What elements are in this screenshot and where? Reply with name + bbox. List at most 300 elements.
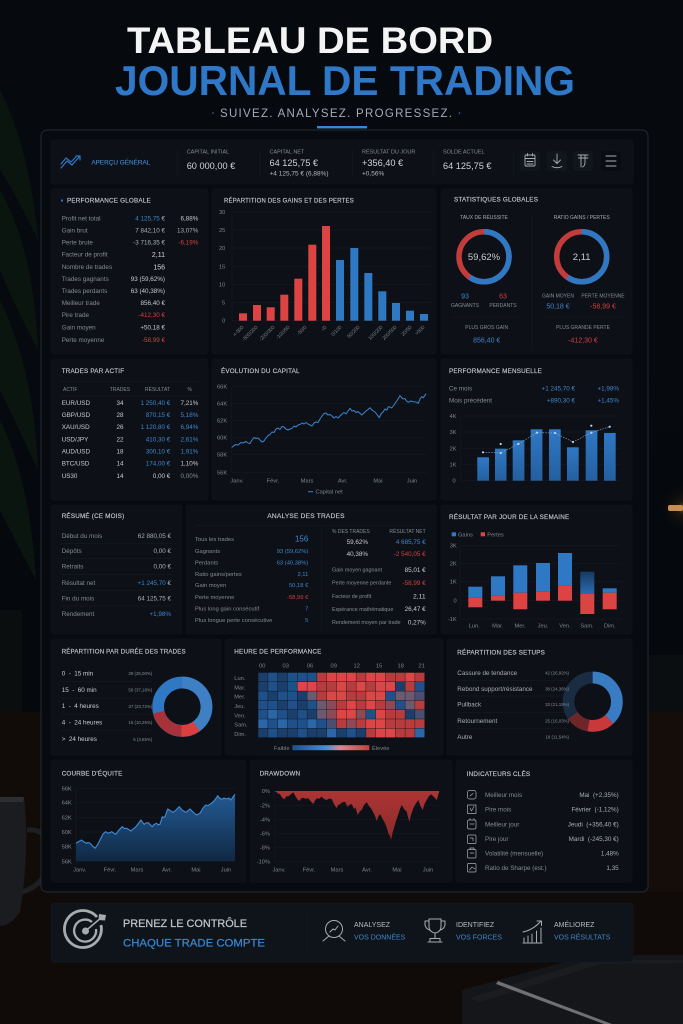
trade stats left: Gagnants	[195, 549, 220, 555]
area chart: Févr.	[104, 868, 117, 874]
line chart: 58K	[217, 453, 227, 459]
panel: indicateurs clés	[456, 760, 632, 882]
histogram: 15	[219, 264, 225, 270]
heading: STATISTIQUES GLOBALES	[454, 196, 538, 204]
indicators rows: Volatilité (mensuelle)	[485, 850, 543, 858]
panel: répartition par durée des trades	[51, 639, 221, 755]
icon: calendar	[520, 151, 540, 171]
setups rows: Cassure de tendance	[457, 670, 518, 677]
stacked bar chart: Ven.	[559, 624, 571, 630]
assets table: 1,91%	[180, 448, 199, 456]
heatmap scale: Faible	[274, 746, 290, 752]
drawdown chart: Janv.	[272, 868, 286, 874]
trade stats right: 4 685,75 €	[396, 539, 426, 546]
metrics table: Gain brut	[62, 228, 88, 234]
heading: HEURE DE PERFORMANCE	[234, 648, 322, 655]
average gain and loss: 50,18 €	[546, 304, 570, 310]
stat: solde actuel	[443, 150, 492, 171]
heading: INDICATEURS CLÉS	[467, 769, 530, 778]
line chart: 66K	[217, 385, 227, 391]
heatmap: Lun.	[234, 676, 246, 682]
setups rows: Autre	[457, 734, 473, 741]
assets table: 0,00 €	[153, 473, 171, 480]
title: JOURNAL DE TRADING	[115, 57, 575, 104]
monthly summary: +1,45%	[597, 398, 619, 404]
heading: RÉPARTITION DES SETUPS	[457, 647, 545, 656]
assets table: 18	[116, 448, 124, 456]
heatmap: Sam.	[234, 723, 248, 729]
average gain and loss: PERTE MOYENNE	[581, 294, 625, 300]
histogram: >500	[414, 325, 427, 337]
trade stats right: 26,47 €	[405, 606, 426, 613]
legend: Pertes	[487, 532, 504, 538]
trade stats right: Espérance mathématique	[332, 607, 393, 613]
histogram: 200/500	[381, 325, 399, 342]
metrics table: -6,19%	[178, 240, 199, 246]
trade stats left: Perte moyenne	[195, 595, 234, 601]
bar chart: 2K	[450, 446, 457, 452]
stat: capital net: 64 125,75 €	[270, 158, 318, 168]
duration rows: > 24 heures	[62, 736, 97, 743]
summary rows: +1 245,70 €	[138, 580, 171, 587]
trade stats right: Gain moyen gagnant	[332, 568, 383, 574]
assets table: RÉSULTAT	[145, 386, 170, 393]
histogram: 100/200	[367, 325, 385, 342]
drawdown chart: -4%	[260, 818, 270, 824]
drawdown chart: Avr.	[362, 868, 372, 874]
assets table: 14	[116, 473, 124, 480]
metrics table: Pire trade	[62, 312, 89, 319]
summary rows: 0,00 €	[153, 548, 171, 555]
item: améliorez	[523, 920, 611, 943]
footer banner	[51, 903, 633, 962]
assets table	[62, 386, 199, 480]
metrics table: Nombre de trades	[62, 264, 112, 271]
assets table: 0,00%	[180, 473, 199, 480]
trade stats right: -2 540,05 €	[394, 551, 426, 558]
metrics table: 2,11	[152, 252, 165, 259]
trade stats left: 7	[305, 606, 308, 612]
average gain and loss: GAIN MOYEN	[542, 294, 574, 300]
metrics table: 63 (40,38%)	[131, 288, 165, 295]
stat: résultat du jour: +0,56%	[362, 170, 384, 178]
largest loss	[556, 325, 611, 344]
assets table: XAU/USD	[62, 424, 90, 431]
heatmap: 15	[376, 664, 382, 670]
item: analysez: ANALYSEZ	[354, 922, 391, 929]
trade stats left: 156	[295, 535, 309, 544]
assets table: 5,18%	[180, 412, 199, 419]
indicators rows: Mai (+2,35%)	[579, 792, 619, 799]
stat: capital net: +4 125,75 € (6,88%)	[270, 170, 329, 178]
stacked bar chart: Mer.	[514, 624, 526, 630]
trade stats right: -58,99 €	[403, 580, 426, 587]
icon: download	[547, 151, 567, 171]
drawdown chart: -2%	[260, 803, 270, 809]
monthly summary: Mois précédent	[449, 398, 492, 404]
metrics table: Trades perdants	[62, 288, 107, 295]
duration rows: 39 (25,00%)	[128, 671, 153, 676]
indicators rows: Ratio de Sharpe (est.)	[485, 865, 547, 872]
indicators rows	[485, 792, 619, 872]
wins and losses counts: PERDANTS	[489, 303, 517, 309]
panel: drawdown	[250, 760, 452, 882]
wins and losses counts	[451, 294, 517, 309]
setups rows: Retournement	[457, 718, 497, 725]
icon: coffee cup	[0, 797, 50, 926]
duration rows: 4 - 24 heures	[62, 720, 102, 726]
indicators rows: Jeudi (+356,40 €)	[568, 822, 619, 828]
summary rows: 64 125,75 €	[138, 596, 171, 602]
duration rows: 16 (10,26%)	[128, 720, 153, 725]
icon: target	[64, 911, 106, 948]
heatmap: Mar.	[234, 685, 246, 691]
heatmap: 21	[419, 664, 425, 670]
drawdown chart	[257, 789, 439, 874]
indicators rows: Pire jour	[485, 836, 508, 843]
trade stats right	[332, 528, 426, 626]
heatmap scale: Élevée	[372, 745, 389, 752]
histogram: 10	[219, 282, 225, 288]
histogram: 0	[222, 319, 225, 325]
wins and losses counts: 93	[461, 294, 469, 300]
metrics table: Meilleur trade	[62, 300, 100, 307]
assets table: 870,15 €	[146, 412, 171, 419]
icon: filter	[573, 151, 593, 171]
trade stats right: Rendement moyen par trade	[332, 620, 401, 626]
monthly summary: +1 245,70 €	[542, 386, 575, 392]
aperçu label: APERÇU GÉNÉRAL	[91, 158, 151, 167]
drawdown chart: Mars	[331, 868, 343, 874]
stat: solde actuel: SOLDE ACTUEL	[443, 150, 485, 156]
line chart	[217, 385, 427, 485]
duration rows: 6 (3,85%)	[133, 737, 153, 742]
summary rows: 0,00 €	[153, 564, 171, 570]
trade stats left: Plus longue perte consécutive	[195, 618, 272, 624]
heatmap: 06	[307, 664, 313, 670]
legend	[452, 532, 504, 538]
heading: PERFORMANCE GLOBALE	[67, 198, 151, 204]
panel: performance globale	[51, 189, 208, 354]
assets table: 174,00 €	[146, 460, 171, 468]
duration rows	[62, 670, 153, 743]
stat: capital initial	[187, 150, 235, 171]
stat: capital initial: 60 000,00 €	[187, 161, 235, 171]
heading: ÉVOLUTION DU CAPITAL	[221, 366, 300, 375]
icon: indicators	[468, 790, 476, 872]
indicators rows: 1,48%	[601, 850, 619, 858]
area chart: 60K	[62, 830, 72, 836]
histogram: 0/100	[330, 325, 344, 338]
duration rows: 15 - 60 min	[62, 687, 97, 694]
assets table: EUR/USD	[62, 400, 90, 407]
average gain and loss: -58,99 €	[590, 304, 616, 310]
assets table: 300,10 €	[146, 448, 171, 456]
icon: menu	[601, 151, 621, 171]
metrics table: -412,30 €	[138, 312, 165, 319]
assets table: 410,30 €	[146, 436, 171, 444]
heading: TRADES PAR ACTIF	[62, 368, 124, 375]
assets table: 14	[116, 460, 124, 468]
assets table: 1,10%	[180, 460, 199, 468]
panel: statistiques globales	[441, 189, 632, 354]
duration rows: 0 - 15 min	[62, 670, 94, 678]
donut chart	[158, 682, 207, 731]
assets table: TRADES	[110, 387, 131, 393]
trade stats right: 85,01 €	[405, 567, 426, 574]
item: analysez	[323, 920, 406, 942]
line chart: Févr.	[267, 479, 280, 485]
metrics table: -58,99 €	[142, 337, 165, 344]
metrics table: 7 842,10 €	[135, 228, 165, 234]
setups rows	[457, 670, 570, 741]
setups rows: 18 (11,54%)	[545, 734, 570, 739]
summary rows: +1,98%	[149, 611, 171, 618]
area chart: 62K	[62, 815, 72, 821]
drawdown chart: -10%	[257, 859, 270, 865]
heatmap: 09	[331, 664, 337, 670]
trade stats right: 2,11	[413, 594, 426, 600]
line chart: Janv.	[230, 479, 244, 485]
stat: solde actuel: 64 125,75 €	[443, 161, 492, 171]
assets table: 2,61%	[180, 436, 199, 444]
histogram: 30	[219, 210, 225, 216]
heatmap: 12	[354, 664, 360, 670]
setups rows: Pullback	[457, 702, 482, 708]
area chart: 66K	[62, 786, 72, 792]
assets table: 7,21%	[180, 400, 199, 407]
wins and losses counts: GAGNANTS	[451, 303, 480, 309]
title: TABLEAU DE BORD	[127, 19, 493, 61]
heatmap scale	[274, 745, 389, 752]
donut: ratio gains pertes: 2,11	[573, 252, 591, 263]
donut: taux de réussite: TAUX DE RÉUSSITE	[460, 214, 509, 221]
trade stats left: 93 (59,62%)	[277, 549, 308, 555]
panel: analyse des trades	[186, 505, 436, 634]
heading: RÉPARTITION PAR DURÉE DES TRADES	[62, 648, 186, 655]
trade stats left: 2,11	[297, 572, 308, 578]
trade stats left: 50,18 €	[289, 583, 309, 589]
trade stats left: -58,99 €	[287, 595, 309, 601]
metrics table: -3 716,35 €	[133, 240, 165, 246]
callout text: PRENEZ LE CONTRÔLE	[123, 917, 247, 930]
assets table: 28	[116, 412, 124, 419]
line chart: 62K	[217, 419, 227, 425]
area chart: Avr.	[162, 868, 172, 874]
indicators rows: Mardi (-245,30 €)	[569, 836, 619, 843]
histogram: <-500	[232, 325, 246, 338]
largest gain: 856,40 €	[473, 338, 500, 344]
drawdown chart: Févr.	[303, 868, 316, 874]
duration rows: 37 (23,72%)	[128, 704, 153, 709]
indicators rows: Pire mois	[485, 806, 511, 814]
donut: taux de réussite: 59,62%	[468, 252, 501, 263]
callout text: CHAQUE TRADE COMPTE	[123, 938, 265, 950]
duration rows: 1 - 4 heures	[62, 703, 99, 710]
stacked bar chart: Mar.	[492, 624, 504, 630]
monthly summary: Ce mois	[449, 386, 472, 392]
trade stats right: RÉSULTAT NET	[389, 528, 426, 535]
summary rows: Rendement	[62, 611, 95, 618]
largest loss: PLUS GRANDE PERTE	[556, 325, 611, 331]
largest gain	[465, 325, 508, 344]
setups rows: 42 (26,92%)	[545, 671, 570, 676]
assets table: 6,94%	[180, 424, 199, 431]
metrics table: 93 (59,62%)	[131, 276, 165, 283]
wins and losses counts: 63	[499, 294, 507, 300]
drawdown chart: -8%	[260, 845, 270, 851]
monthly summary	[449, 386, 619, 404]
trade stats left: Perdants	[195, 560, 218, 566]
indicators rows: 1,35	[606, 865, 619, 872]
metrics table: 4 125,75 €	[135, 216, 165, 222]
stacked bar chart: 1K	[450, 580, 457, 586]
metrics table: 156	[153, 264, 165, 271]
legend: Capital net	[316, 490, 343, 496]
metrics table: Gain moyen	[62, 324, 96, 332]
panel: trades par actif	[51, 359, 208, 500]
area chart: Mai	[191, 868, 201, 874]
legend: Gains	[458, 532, 473, 538]
metrics table: 856,40 €	[140, 300, 165, 307]
stat: résultat du jour: +356,40 €	[362, 158, 403, 168]
item: identifiez: VOS FORCES	[456, 934, 502, 942]
title	[115, 19, 575, 104]
icon: chart trend	[61, 156, 80, 168]
panel: courbe d'équité	[51, 760, 246, 882]
summary rows: Fin du mois	[62, 596, 94, 602]
summary rows: Retraits	[62, 564, 83, 570]
trade stats right: Perte moyenne perdante	[332, 581, 391, 587]
heatmap: Ven.	[234, 713, 246, 719]
callout text	[123, 917, 265, 950]
histogram: -100/50	[275, 325, 292, 341]
heatmap: Dim.	[234, 732, 246, 738]
stat: résultat du jour: RÉSULTAT DU JOUR	[362, 148, 415, 156]
stat: résultat du jour	[362, 148, 415, 178]
assets table: US30	[62, 473, 78, 480]
item: améliorez: AMÉLIOREZ	[554, 920, 595, 929]
histogram: -50/0	[296, 325, 309, 337]
heading: COURBE D'ÉQUITE	[62, 768, 123, 778]
monthly summary: +1,98%	[597, 386, 619, 392]
assets table: 1 250,40 €	[141, 400, 171, 407]
histogram: 20	[219, 246, 225, 252]
heading: ANALYSE DES TRADES	[267, 513, 345, 520]
drawdown chart: 0%	[262, 789, 270, 795]
assets table: 34	[116, 400, 124, 407]
histogram: -/0	[320, 325, 329, 333]
bar chart: 4K	[450, 414, 457, 420]
assets table: ACTIF	[63, 387, 77, 393]
largest loss: -412,30 €	[568, 338, 598, 344]
area chart	[62, 786, 236, 874]
stacked bar chart: 3K	[450, 544, 457, 550]
area chart: 56K	[62, 859, 72, 865]
area chart: Juin	[221, 868, 231, 874]
panel: heure de performance	[225, 639, 443, 755]
heatmap	[234, 664, 425, 738]
notebook and pen	[462, 955, 683, 1024]
donut: ratio gains pertes: RATIO GAINS / PERTES	[554, 215, 610, 221]
summary rows: 62 880,05 €	[138, 533, 171, 540]
stacked bar chart: 0	[454, 598, 457, 604]
panel: performance mensuelle	[441, 359, 632, 500]
line chart: Avr.	[338, 479, 348, 485]
bar chart: 0	[452, 479, 456, 485]
trade stats right: 59,62%	[347, 539, 368, 546]
histogram: -500/200	[241, 325, 260, 343]
assets table: %	[187, 387, 192, 393]
histogram: -200/300	[258, 325, 277, 343]
trade stats left: 5	[305, 618, 308, 624]
assets table: USD/JPY	[62, 436, 89, 444]
trade stats right: Facteur de profit	[332, 594, 372, 600]
metrics table: 6,88%	[180, 216, 199, 222]
subtitle: SUIVEZ. ANALYSEZ. PROGRESSEZ.	[220, 108, 452, 120]
assets table: AUD/USD	[62, 448, 90, 456]
stacked bar chart: -1K	[448, 617, 457, 623]
heading: RÉPARTITION DES GAINS ET DES PERTES	[224, 198, 354, 204]
panel: répartition des gains et des pertes	[212, 189, 436, 354]
monthly summary: +890,30 €	[547, 398, 575, 404]
stacked bar chart: Dim.	[604, 624, 616, 630]
area chart: Mars	[131, 868, 143, 874]
histogram: 25	[219, 228, 225, 234]
assets table: 1 120,80 €	[141, 424, 171, 431]
assets table: BTC/USD	[62, 460, 90, 468]
item: analysez: VOS DONNÉES	[354, 932, 406, 942]
metrics table: Perte moyenne	[62, 337, 105, 344]
drawdown chart: Juin	[423, 868, 433, 874]
duration rows: 58 (37,18%)	[128, 688, 153, 692]
donut: ratio gains pertes	[554, 215, 610, 282]
heatmap: Mer.	[234, 695, 246, 701]
trade stats left: Ratio gains/pertes	[195, 572, 242, 578]
trade stats left: Tous les trades	[195, 537, 234, 543]
item: identifiez	[425, 919, 502, 942]
summary rows	[62, 533, 171, 618]
area chart: Janv.	[73, 868, 87, 874]
setups rows: 38 (24,36%)	[545, 686, 570, 691]
stat: capital initial: CAPITAL INITIAL	[187, 150, 229, 156]
panel: répartition des setups	[447, 639, 632, 755]
area chart: 58K	[62, 845, 72, 851]
trade stats left: Plus long gain consécutif	[195, 606, 260, 612]
line chart: 60K	[217, 436, 227, 442]
bar chart: 3K	[450, 430, 457, 436]
summary rows: Dépôts	[62, 548, 82, 555]
heading: DRAWDOWN	[260, 770, 300, 778]
stacked bar chart	[448, 544, 621, 630]
panel: résultat par jour de la semaine	[441, 505, 632, 634]
histogram: 50/200	[346, 325, 362, 340]
metrics table: Profit net total	[62, 216, 101, 222]
setups rows: 25 (16,03%)	[545, 718, 570, 723]
heatmap: Jeu.	[234, 704, 245, 710]
setups rows: Rebond support/résistance	[457, 686, 533, 693]
trade stats right: % DES TRADES	[332, 529, 370, 535]
stat: capital net: CAPITAL NET	[270, 150, 305, 156]
trade stats left	[195, 535, 309, 624]
trade stats left: 63 (40,38%)	[277, 560, 308, 566]
average gain and loss	[542, 294, 625, 310]
trade stats right: 0,27%	[408, 620, 426, 626]
heatmap: 00	[259, 664, 265, 670]
heading: RÉSUMÉ (CE MOIS)	[62, 511, 124, 520]
heatmap: 03	[283, 664, 289, 670]
line chart: Mars	[301, 479, 313, 485]
